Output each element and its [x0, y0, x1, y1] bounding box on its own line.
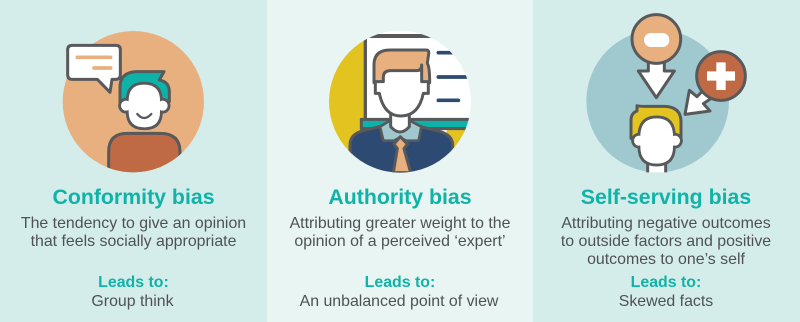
description: conformity: that feels socially appropriate — [31, 233, 237, 250]
description: authority: Attributing greater weight to the — [290, 215, 511, 232]
heading: conformity bias: Conformity bias — [52, 185, 215, 209]
panel: self-serving bias — [561, 13, 770, 306]
description: self-serving — [561, 215, 771, 268]
leads to: self-serving: Skewed facts — [619, 293, 713, 310]
leads to: self-serving — [619, 274, 713, 310]
leads to: authority: An unbalanced point of view — [300, 293, 499, 310]
description: conformity: The tendency to give an opinion — [21, 215, 246, 232]
person — [631, 106, 681, 178]
leads to: authority: Leads to: — [365, 274, 435, 291]
illustration: conformity — [63, 31, 204, 177]
description: authority — [290, 215, 511, 250]
description: conformity — [21, 215, 246, 250]
leads to: self-serving: Leads to: — [631, 274, 701, 291]
illustration: self-serving — [586, 15, 745, 178]
leads to: conformity: Group think — [91, 293, 174, 310]
description: authority: opinion of a perceived ‘expert’ — [294, 233, 506, 250]
description: self-serving: outcomes to one’s self — [587, 251, 745, 268]
heading: authority bias: Authority bias — [328, 185, 472, 209]
speech bubble — [68, 45, 120, 92]
leads to: authority — [300, 274, 499, 310]
illustration: authority — [329, 30, 471, 173]
minus icon and arrow — [632, 15, 681, 98]
heading: self-serving bias: Self-serving bias — [581, 185, 751, 209]
description: self-serving: to outside factors and positive — [561, 233, 771, 250]
panel: authority bias — [267, 0, 533, 322]
leads to: conformity: Leads to: — [98, 274, 169, 291]
plus icon and arrow — [685, 52, 745, 114]
panel: conformity bias — [21, 31, 246, 310]
description: self-serving: Attributing negative outcomes — [561, 215, 771, 232]
leads to: conformity — [91, 274, 174, 310]
